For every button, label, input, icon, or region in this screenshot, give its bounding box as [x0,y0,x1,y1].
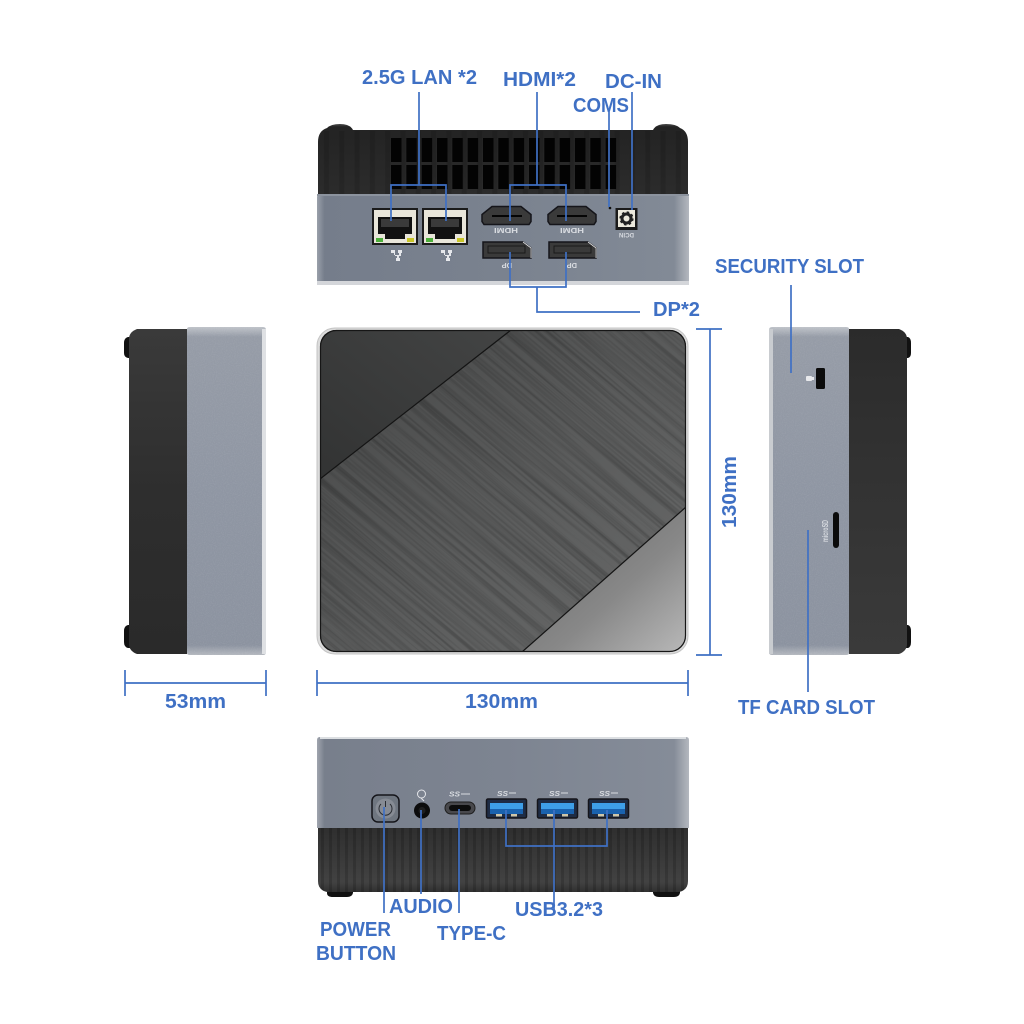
rubber feet [124,337,130,648]
label: security slot: SECURITY SLOT [715,256,864,278]
label: DC-IN: DC-IN [605,71,662,93]
leader lines: front ports [384,807,607,913]
DC-in jack: DCIN [619,231,634,238]
USB port 2: SS [549,789,560,798]
device: left side view [124,327,266,655]
label: audio: AUDIO [389,896,453,918]
dimension arrow: depth 53mm [125,670,266,696]
USB port 3 [588,789,628,818]
USB port 1 [486,789,526,818]
dimension arrow: width 130mm [317,670,688,696]
label: TF card slot: TF CARD SLOT [738,697,875,719]
label: COMS: COMS [573,95,629,117]
label: power button: BUTTON [316,943,396,965]
grey side face [769,327,849,655]
upper left glossy section [320,330,511,479]
microSD slot [821,512,839,548]
rubber feet [906,337,911,648]
DP port 2 [549,242,596,270]
DP port 1: DP [502,261,512,270]
USB-C port: SS [449,790,460,798]
dimension arrow: height 130mm [696,329,722,655]
DP port 1 [483,242,531,270]
black body [849,329,907,654]
device: top panel [316,328,688,654]
label: width dimension: 130mm [465,691,538,713]
audio jack [414,790,430,818]
label: power button: POWER [320,919,392,941]
label: DP: DP*2 [653,299,700,321]
DC-in jack [616,208,638,238]
grey side face [187,327,266,655]
HDMI port 2: HDMI [560,226,584,235]
USB port 3: SS [599,789,610,798]
label: USB 3.2: USB3.2*3 [515,899,603,921]
leader lines: side ports [791,285,808,692]
power button [372,795,399,822]
USB-C port [445,790,475,814]
lower right glossy section [522,507,686,652]
black body [129,329,187,654]
device: right side view [769,327,911,655]
USB port 2 [538,789,578,818]
USB port 1: SS [497,789,508,798]
security lock slot [806,368,825,389]
black ribbed body [318,826,688,892]
device: front view [317,737,689,897]
HDMI port 1 [482,206,531,235]
panel base [320,330,686,652]
HDMI port 1: HDMI [494,226,518,235]
label: 2.5G LAN: 2.5G LAN *2 [362,67,477,89]
LAN port 1 [372,208,418,261]
CMOS reset pinhole [609,207,611,209]
HDMI port 2 [548,206,596,235]
ventilation slots [391,138,617,189]
black vented body with foot shoulders [318,124,688,196]
microSD slot: microSD [821,520,830,542]
grey port face [317,194,689,285]
label: height dimension: 130mm [719,456,741,528]
label: depth dimension: 53mm [165,691,226,713]
LAN port 2 [422,208,468,261]
brushed middle section [320,330,686,652]
device: rear view [317,124,689,285]
label: Type-C: TYPE-C [437,923,506,945]
label: HDMI: HDMI*2 [503,69,576,91]
DP port 2: DP [567,261,577,270]
label: power button [316,919,396,965]
leader lines: rear ports [391,92,640,312]
seam lines [320,330,686,652]
rubber feet [327,890,680,897]
brushed texture [321,331,685,651]
outer silver rim [317,328,688,654]
grey port face [317,737,689,828]
